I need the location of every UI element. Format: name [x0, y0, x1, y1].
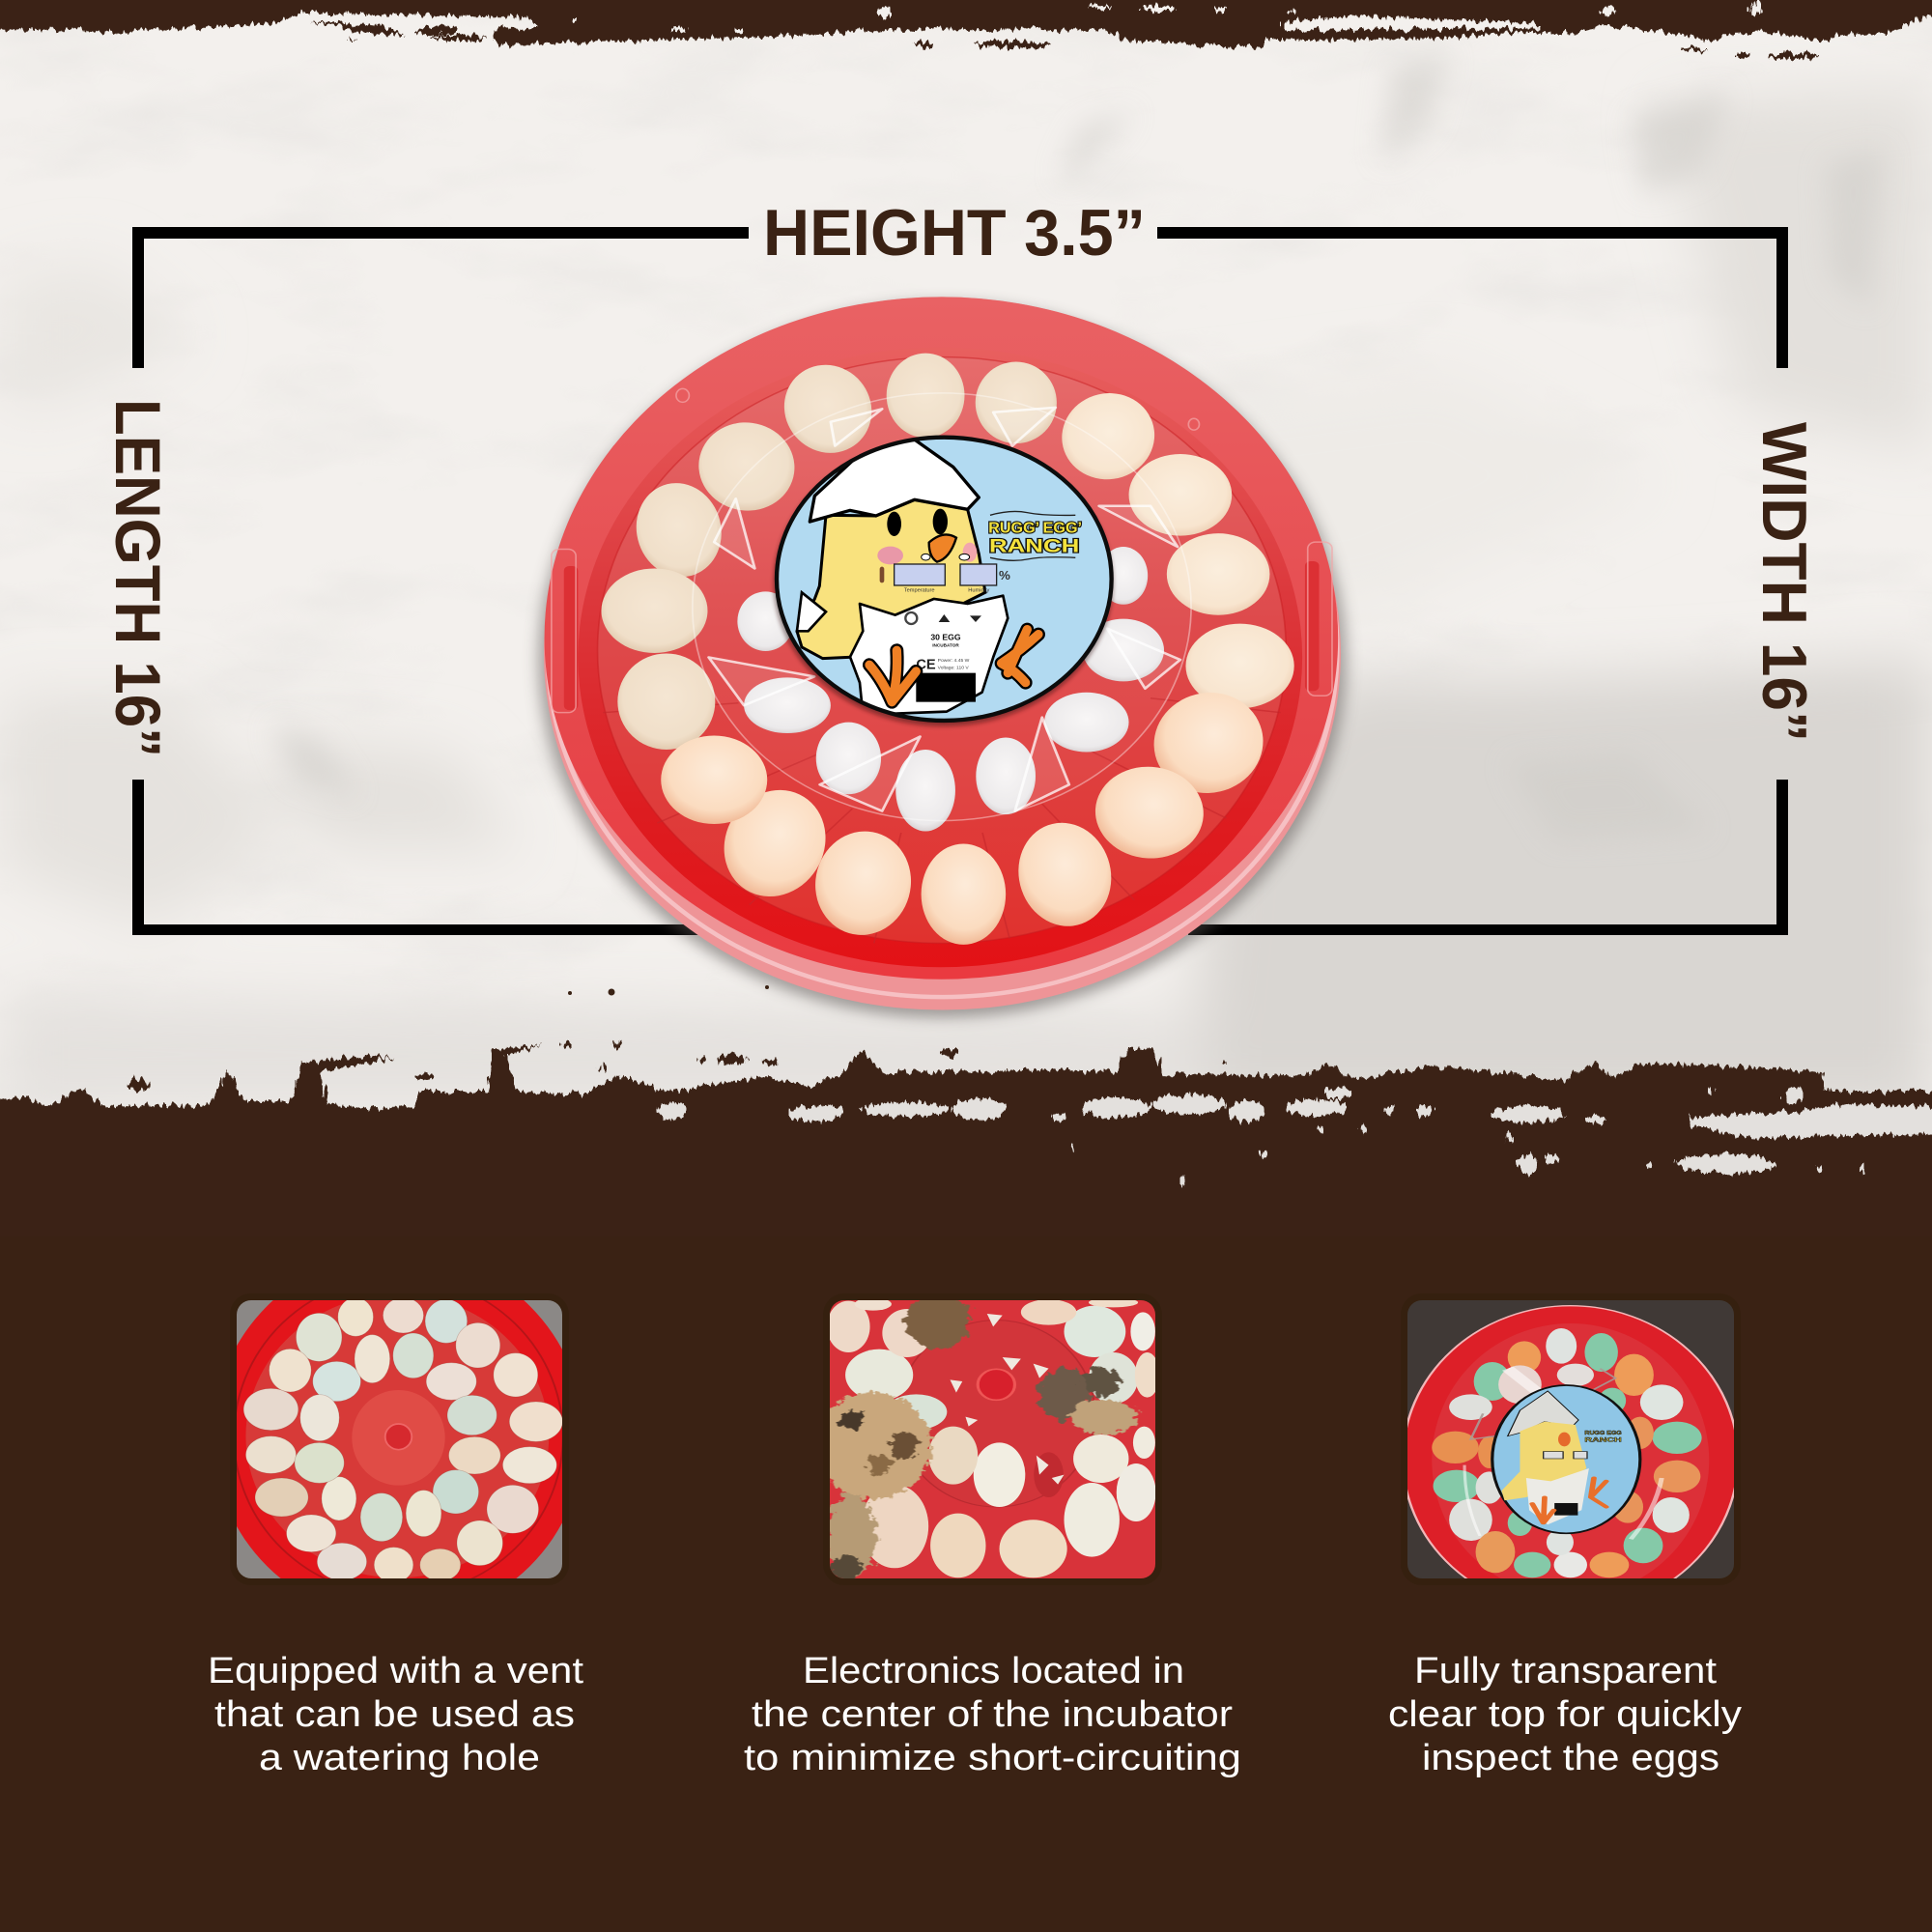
caption: clear top [1388, 1651, 1742, 1778]
upper eggshell [810, 438, 979, 522]
painted off-white background [0, 0, 1932, 1159]
top edge paint specks [308, 2, 1820, 59]
brown lower section with torn edge [0, 1045, 1932, 1932]
power socket block [916, 673, 976, 702]
label: width dimension: WIDTH 16” [1749, 422, 1820, 742]
center control label: Rugg Egg Ranch chick: Power: 4.45 W [938, 658, 970, 664]
chick feet [869, 630, 1038, 702]
humidity display [960, 564, 997, 585]
caption: electronics: Electronics located in [803, 1651, 1184, 1691]
center control label: Rugg Egg Ranch chick: CE [916, 658, 936, 673]
dirt specks under incubator [568, 985, 769, 995]
caption: electronics: the center of the incubator [752, 1694, 1233, 1735]
caption: clear top: inspect the eggs [1422, 1738, 1719, 1778]
caption: vent: that can be used as [214, 1694, 575, 1735]
brand logo: RANCH [989, 537, 1079, 557]
caption: vent [208, 1651, 583, 1778]
chick beak [929, 534, 956, 562]
shell fragments [951, 1314, 1064, 1485]
center label [1492, 1385, 1640, 1533]
label: length dimension: LENGTH 16” [102, 399, 174, 757]
caption: vent: a watering hole [259, 1738, 540, 1778]
product photo: incubator [538, 297, 1347, 1018]
control buttons [905, 612, 917, 624]
chick body [797, 499, 985, 659]
center control label: Rugg Egg Ranch chick: % [999, 568, 1010, 582]
chick left [814, 1393, 931, 1581]
photo panel: egg tray with vent [213, 1252, 584, 1620]
eggs [827, 1297, 1159, 1577]
clear lid reflections [1464, 1369, 1662, 1539]
chick top [906, 1292, 970, 1350]
center control label: Rugg Egg Ranch chick: 30 EGG [930, 633, 961, 642]
lower eggshell [850, 596, 1008, 715]
dimension frame [132, 227, 1788, 935]
incubator body with lid and eggs [538, 297, 1347, 1018]
center control label: Rugg Egg Ranch chick [773, 435, 1114, 726]
brand logo [988, 521, 1082, 557]
center control label: Rugg Egg Ranch chick: INCUBATOR [932, 642, 959, 647]
center control label: Rugg Egg Ranch chick: Temperature [904, 588, 935, 594]
colored eggs [1432, 1328, 1702, 1577]
tray rim [213, 1252, 584, 1620]
heading: height dimension: HEIGHT 3.5” [763, 196, 1146, 270]
red tray [1403, 1306, 1738, 1611]
photo panel: transparent clear top: RUGG EGG [1584, 1430, 1622, 1435]
top torn brown edge [0, 0, 1932, 48]
center disc [897, 1321, 1094, 1507]
chick eyes [887, 512, 901, 536]
center control label: Rugg Egg Ranch chick: Voltage: 110 V [938, 665, 969, 670]
paint gaps in brown edge [128, 1041, 1932, 1188]
center control label: Rugg Egg Ranch chick: Humidity [968, 588, 989, 594]
brand logo: RUGG’ EGG’ [988, 521, 1082, 537]
caption: electronics [744, 1651, 1241, 1778]
chick cheeks [877, 547, 903, 564]
caption: electronics: to minimize short-circuiting [744, 1738, 1241, 1778]
caption: vent: Equipped with a vent [208, 1651, 583, 1691]
chick right [1038, 1367, 1138, 1435]
photo panel: transparent clear top [1401, 1293, 1742, 1611]
eggs [243, 1297, 562, 1582]
caption: clear top: Fully transparent [1414, 1651, 1717, 1691]
center vent disc [352, 1390, 445, 1486]
photo panel: transparent clear top: RANCH [1584, 1436, 1622, 1444]
temperature display [895, 564, 945, 585]
photo panel: hatching chicks [811, 1285, 1181, 1591]
caption: clear top: clear top for quickly [1388, 1694, 1742, 1735]
